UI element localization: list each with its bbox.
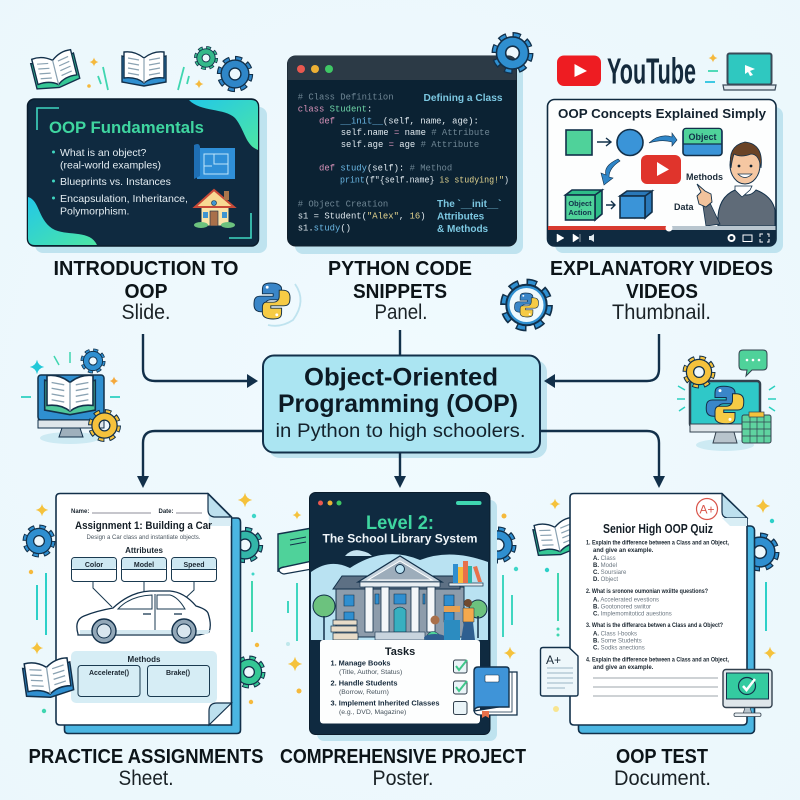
- label: OOP test: Document.: [614, 767, 711, 790]
- label: introduction to OOP: INTRODUCTION TO: [54, 258, 238, 280]
- label: introduction to OOP: OOP: [124, 281, 168, 303]
- methods: Methods: [128, 655, 161, 664]
- quiz questions: A. Class I-books: [593, 632, 637, 638]
- python code: # Object Creation: [298, 200, 388, 210]
- icon: python logo: [254, 283, 301, 326]
- python code: s1 = Student("Alex", 16): [298, 212, 426, 222]
- attributes: [72, 546, 216, 582]
- label: explanatory videos: [550, 258, 773, 324]
- label: python code snippets: [328, 258, 472, 324]
- code annotations: The `__init__`: [437, 199, 501, 210]
- methods: Accelerate(): [89, 670, 129, 677]
- quiz title: Senior High OOP Quiz: [603, 522, 713, 536]
- quiz questions: C. Sodks anections: [593, 646, 645, 652]
- python code: self.name = name # Attribute: [341, 128, 490, 138]
- python code: s1.study(): [298, 224, 351, 234]
- icon: A+ paper: [540, 648, 578, 696]
- concept diagram: Object: [688, 132, 717, 142]
- slide title: OOP Fundamentals: [49, 118, 204, 137]
- tasks card: (Title, Author, Status): [339, 669, 402, 676]
- panel: assignment sheet: [56, 494, 240, 734]
- sheet header: Name:: [71, 509, 89, 515]
- icon: open book: [22, 657, 74, 701]
- attributes: Attributes: [125, 546, 163, 555]
- label: python code snippets: SNIPPETS: [353, 281, 447, 303]
- slide bullets: What is an object?: [60, 147, 147, 159]
- sheet header: Assignment 1: Building a Car: [75, 520, 213, 532]
- sheet header: Design a Car class and instantiate objects.: [86, 534, 201, 541]
- quiz questions: 1. Explain the difference between a Class and an Object,: [586, 540, 729, 546]
- code annotations: [424, 93, 503, 235]
- label: OOP test: OOP TEST: [616, 746, 708, 768]
- decorations: assignment sheet: [26, 493, 262, 713]
- icon: monitor with book: [21, 352, 120, 444]
- tasks card: 1. Manage Books: [330, 658, 390, 668]
- label: practice assignments: PRACTICE ASSIGNMENTS: [28, 746, 264, 768]
- label: python code snippets: PYTHON CODE: [328, 258, 472, 280]
- tasks card: [320, 640, 480, 724]
- python code: def study(self): # Method: [319, 164, 452, 174]
- python code: def __init__(self, name, age):: [319, 116, 479, 126]
- concept diagram: Data: [674, 202, 695, 212]
- attributes: Speed: [183, 562, 205, 569]
- slide bullets: [52, 147, 188, 218]
- panel: central topic: Programming (OOP): [278, 390, 518, 418]
- icon: house: [194, 190, 235, 228]
- attributes: Color: [85, 562, 103, 569]
- sheet header: [71, 509, 213, 541]
- grade stamp: [696, 498, 718, 520]
- concept diagram: Action: [568, 208, 592, 217]
- panel: code snippet: [288, 56, 523, 254]
- icon: python gear: [506, 285, 546, 325]
- decorations: poster: [278, 510, 518, 694]
- tasks card: 3. Implement Inherited Classes: [330, 698, 440, 708]
- python code: [298, 92, 509, 234]
- label: comprehensive project: Poster.: [372, 767, 434, 790]
- tasks card: Tasks: [385, 646, 415, 658]
- slide bullets: Blueprints vs. Instances: [60, 176, 171, 188]
- central subtitle: in Python to high schoolers.: [276, 421, 526, 442]
- quiz questions: 4. Explain the difference between a Class and an Object,: [586, 658, 729, 664]
- panel: quiz document: [570, 494, 754, 734]
- quiz questions: [586, 540, 729, 696]
- flow arrows: [137, 330, 665, 488]
- label: explanatory videos: Thumbnail.: [612, 301, 711, 324]
- quiz questions: D. Object: [593, 577, 618, 583]
- methods: Brake(): [166, 670, 190, 677]
- decorations: test document: [532, 499, 776, 712]
- quiz questions: 3. What is the differarca betwen a Class and a Object?: [586, 623, 723, 629]
- panel: library poster: [310, 492, 497, 741]
- attributes: Model: [134, 562, 154, 569]
- python code: # Class Definition: [298, 92, 394, 102]
- panel: central topic: [263, 356, 547, 458]
- icon: laptop: [723, 54, 776, 90]
- python code: class Student:: [298, 104, 372, 114]
- python code: self.age = age # Attribute: [341, 140, 479, 150]
- icon: A+ paper: A+: [546, 653, 561, 667]
- label: OOP test: [614, 746, 711, 790]
- quiz questions: A. Class: [593, 556, 616, 562]
- quiz questions: B. Some Studehts: [593, 638, 642, 644]
- concept diagram: [566, 128, 723, 220]
- icon: blue book: [474, 667, 517, 718]
- code annotations: & Methods: [437, 224, 489, 235]
- label: python code snippets: Panel.: [374, 301, 428, 324]
- video heading: OOP Concepts Explained Simply: [558, 107, 766, 121]
- label: comprehensive project: COMPREHENSIVE PROJECT: [280, 746, 526, 768]
- icon: monitor with python: [677, 350, 776, 451]
- sheet header: Date:: [158, 509, 174, 515]
- panel: intro slide: [28, 99, 267, 253]
- label: explanatory videos: VIDEOS: [626, 281, 698, 303]
- python code: print(f"{self.name} is studying!"): [340, 176, 509, 186]
- quiz questions: B. Model: [593, 563, 617, 569]
- label: introduction to OOP: [54, 258, 238, 324]
- grade stamp: A+: [699, 502, 715, 516]
- methods: [71, 651, 217, 703]
- logo: YouTube: [557, 50, 718, 92]
- slide bullets: Polymorphism.: [60, 206, 129, 218]
- quiz questions: C. Soursiare: [593, 570, 627, 576]
- logo: YouTube: YouTube: [607, 50, 696, 92]
- panel: video thumbnail: [548, 100, 783, 253]
- icon: blueprint: [194, 144, 235, 179]
- slide bullets: (real-world examples): [60, 160, 161, 172]
- quiz questions: and give an example.: [593, 665, 654, 671]
- label: explanatory videos: EXPLANATORY VIDEOS: [550, 258, 773, 280]
- slide bullets: Encapsulation, Inheritance,: [60, 193, 188, 205]
- presenter: [697, 142, 775, 226]
- concept diagram: Methods: [686, 172, 723, 182]
- tasks card: 2. Handle Students: [330, 678, 398, 688]
- central title: Object-Oriented: [304, 364, 498, 392]
- label: introduction to OOP: Slide.: [122, 301, 170, 324]
- quiz questions: B. Gootonored swiitor: [593, 604, 651, 610]
- label: practice assignments: [28, 746, 264, 790]
- concept diagram: Object: [568, 199, 592, 208]
- car diagram: [77, 582, 210, 643]
- label: practice assignments: Sheet.: [118, 767, 174, 790]
- poster title: Level 2:: [366, 513, 434, 534]
- quiz questions: A. Accelerated evestions: [593, 598, 659, 604]
- quiz questions: and give an example.: [593, 548, 654, 554]
- code annotations: Attributes: [437, 212, 485, 222]
- quiz questions: 2. What is sronone oumonian wxiitte questions?: [586, 589, 708, 595]
- quiz questions: C. Implemomitoticd auestions: [593, 612, 672, 618]
- label: comprehensive project: [280, 746, 526, 790]
- code annotations: Defining a Class: [424, 93, 503, 104]
- icon: monitor with check: [723, 670, 772, 716]
- video player bar: [548, 224, 776, 246]
- icon: gear on code panel: [497, 37, 528, 69]
- panel: library poster: The School Library System: [322, 532, 478, 546]
- tasks card: (e.g., DVD, Magazine): [339, 709, 406, 716]
- library illustration: [311, 550, 488, 642]
- tasks card: (Borrow, Return): [339, 689, 389, 696]
- icons above slide: [30, 49, 249, 93]
